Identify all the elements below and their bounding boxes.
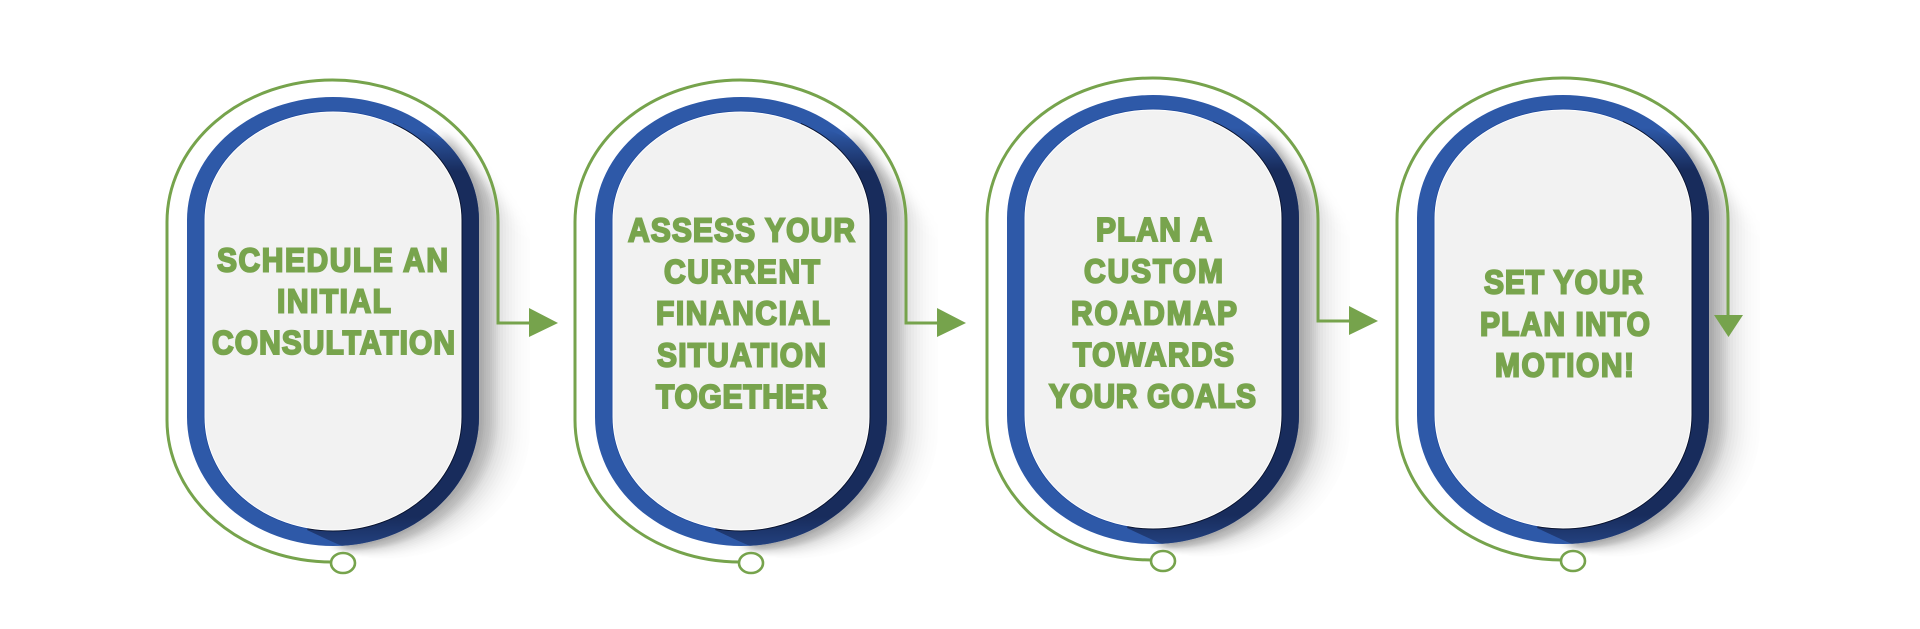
step 4 green connector line [1397,78,1728,560]
step 4 label [1480,263,1650,384]
step 3 cast shadow [1010,96,1350,557]
step 2 label: ASSESS YOUR [628,211,855,249]
step 3 label [1049,210,1256,415]
step 4 label: SET YOUR [1484,263,1643,301]
step 3 green connector line [987,78,1352,560]
step 3 label: PLAN A [1096,210,1212,248]
step 2 label: TOGETHER [656,377,827,415]
step 3 blue pill frame [1007,95,1299,544]
step 1 label: CONSULTATION [212,323,455,361]
step 4 cast shadow [1420,96,1760,557]
step 3 arrowhead [1349,306,1378,335]
step 3 start node [1151,551,1175,571]
step 1 arrowhead [529,308,558,337]
step 2 card [575,80,966,573]
step 4 start node [1561,551,1585,571]
step 3 label: YOUR GOALS [1049,377,1256,415]
step 3 label: CUSTOM [1084,252,1223,290]
step 1 cast shadow [190,98,530,559]
step 2 label: SITUATION [657,336,826,374]
step 3 label: ROADMAP [1071,294,1237,332]
step 4 label: PLAN INTO [1480,305,1650,343]
step 2 arrowhead [937,308,966,337]
step 2 green connector line [575,80,940,562]
step 3 card [987,78,1378,571]
step 2 label [628,211,855,415]
step 1 blue pill frame [187,97,479,546]
step 2 cast shadow [598,98,938,559]
step 4 card [1397,78,1760,571]
step 1 label: SCHEDULE AN [217,241,448,279]
step 4 downward arrowhead [1714,315,1743,337]
step 4 label: MOTION! [1495,346,1634,384]
step 1 label [212,241,455,361]
step 1 card [167,80,558,573]
step 3 label: TOWARDS [1073,335,1234,373]
step 1 green connector line [167,80,532,562]
step 2 label: CURRENT [664,252,821,290]
step 1 label: INITIAL [277,282,391,320]
step 4 blue pill frame [1417,95,1709,544]
step 2 start node [739,553,763,573]
step 2 blue pill frame [595,97,887,546]
step 2 label: FINANCIAL [656,294,830,332]
step 1 start node [331,553,355,573]
